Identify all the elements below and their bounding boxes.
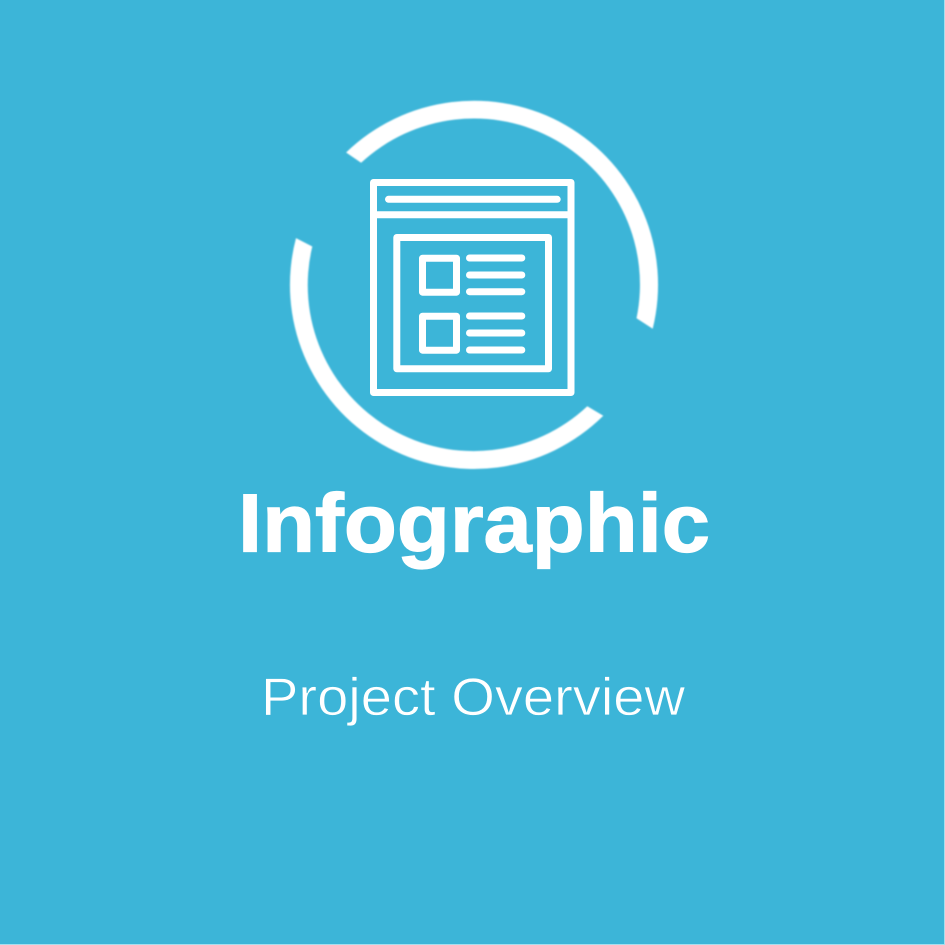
first list item (422, 258, 522, 292)
title: Infographic (238, 477, 710, 570)
content panel (397, 238, 548, 369)
window frame (374, 182, 571, 392)
window header divider (374, 211, 571, 218)
icon: document window (374, 182, 571, 392)
subtitle: Project Overview (261, 668, 686, 727)
second list item (422, 316, 522, 350)
ring arc: upper right (346, 101, 658, 329)
ring arc: lower left (290, 238, 603, 469)
icon: broken circular ring (290, 101, 658, 469)
window address bar (388, 196, 557, 203)
